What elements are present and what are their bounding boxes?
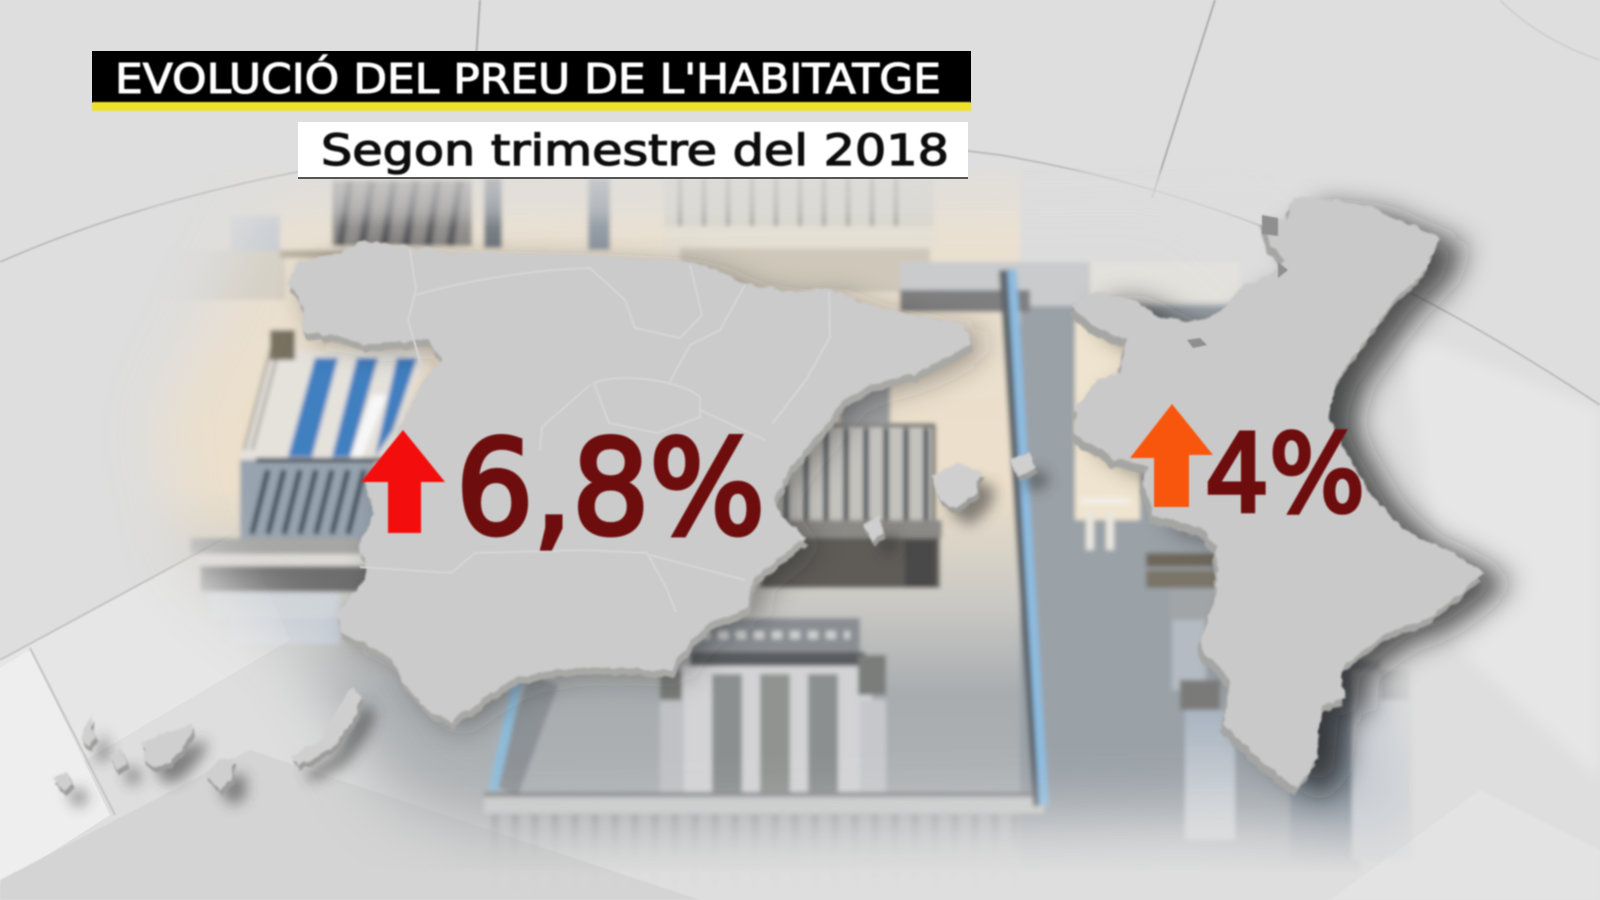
Camp de Túria notch — [1187, 338, 1207, 348]
value: Spain 6,8%: 6,8% — [456, 412, 765, 564]
lower window — [660, 618, 886, 796]
subtitle box — [298, 122, 968, 179]
building photograph — [100, 170, 1412, 895]
left cornice — [210, 215, 344, 300]
map: Balearic and Canary islands — [53, 454, 1038, 797]
red up arrow — [361, 430, 445, 533]
balustrade — [484, 790, 1046, 832]
Spain regional borders — [360, 250, 830, 612]
value: Comunitat Valenciana 4%: 4% — [1205, 413, 1365, 537]
left balcony railing — [190, 458, 386, 644]
canary islands drop shadow — [67, 470, 1050, 808]
enclave blocks near northern border — [1262, 215, 1288, 278]
right balcony railing — [760, 380, 942, 588]
map: Comunitat Valenciana — [1067, 196, 1485, 796]
right column capital — [1080, 498, 1410, 840]
map shadows — [302, 206, 1511, 798]
subtitle text: Segon trimestre del 2018 — [321, 126, 949, 176]
upper balcony — [664, 178, 1240, 312]
photo top fade veil — [140, 178, 1340, 218]
title text: EVOLUCIÓ DEL PREU DE L'HABITATGE — [115, 55, 941, 103]
title bar — [92, 51, 971, 111]
drainpipes — [493, 270, 1044, 806]
map: Spain — [288, 240, 972, 729]
orange up arrow — [1130, 404, 1213, 507]
blue shuttered window — [240, 330, 425, 460]
upper window grating — [332, 178, 610, 250]
